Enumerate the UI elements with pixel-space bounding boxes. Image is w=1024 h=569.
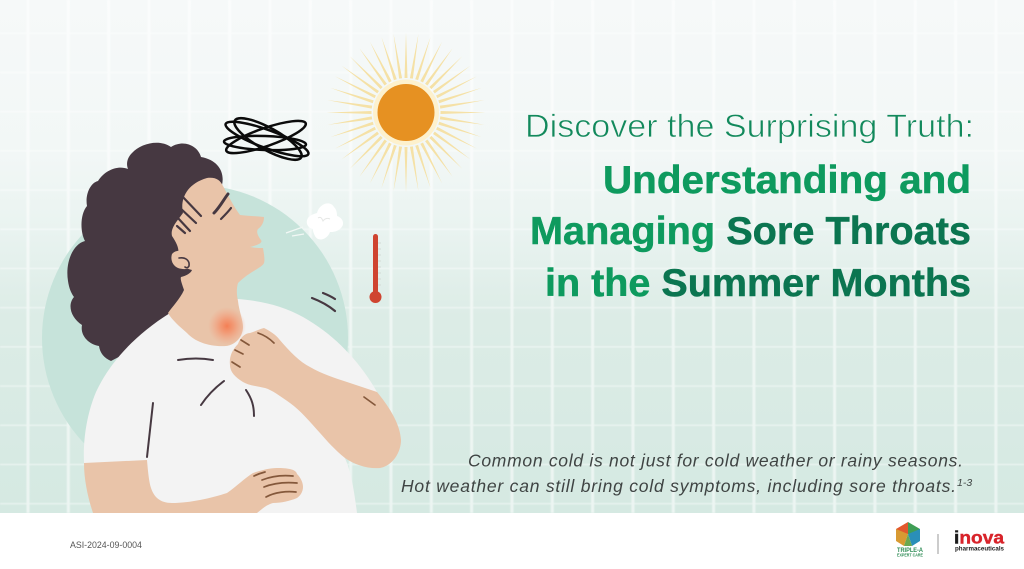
footer band	[0, 513, 1024, 569]
white shirt	[84, 299, 377, 513]
logo: inova pharmaceuticals: pharmaceuticals	[955, 546, 1004, 552]
logo: Triple-A Expert Care: TRIPLE-A	[897, 547, 923, 554]
heading line: intro: Discover the Surprising Truth:	[525, 108, 974, 144]
caption text: Hot weather can still bring cold symptoms, including sore throats.	[401, 476, 956, 496]
document code: ASI-2024-09-0004	[70, 540, 142, 550]
logo hexagon	[896, 522, 920, 546]
citation superscript: 1-3	[957, 477, 972, 489]
icon: sun	[326, 33, 486, 192]
caption text	[401, 450, 972, 496]
heading	[525, 108, 974, 305]
logo: Triple-A Expert Care: EXPERT CARE	[897, 552, 924, 558]
logo: Triple-A Expert Care	[896, 522, 924, 558]
throat glow	[208, 307, 246, 345]
divider	[938, 534, 939, 554]
raised arm and hand	[230, 328, 401, 468]
face and neck	[168, 178, 264, 346]
ear	[171, 251, 192, 269]
mint circle behind the person	[42, 188, 348, 443]
icon: thermometer	[370, 234, 382, 303]
heading line 1: Understanding and	[603, 159, 971, 202]
lower arm and hand	[84, 460, 303, 513]
heading line 3: in the Summer Months	[545, 262, 971, 305]
icon: breath puff	[286, 203, 343, 239]
heading line 2: Managing Sore Throats	[530, 210, 971, 253]
icon: dizzy scribble	[223, 111, 311, 167]
logo: inova pharmaceuticals: inova	[954, 528, 1004, 548]
hair	[67, 143, 223, 361]
facial, fold and finger lines	[147, 194, 375, 497]
caption text: Common cold is not just for cold weather or rainy seasons.	[468, 450, 963, 470]
illustration: woman with sore throat	[67, 143, 401, 513]
